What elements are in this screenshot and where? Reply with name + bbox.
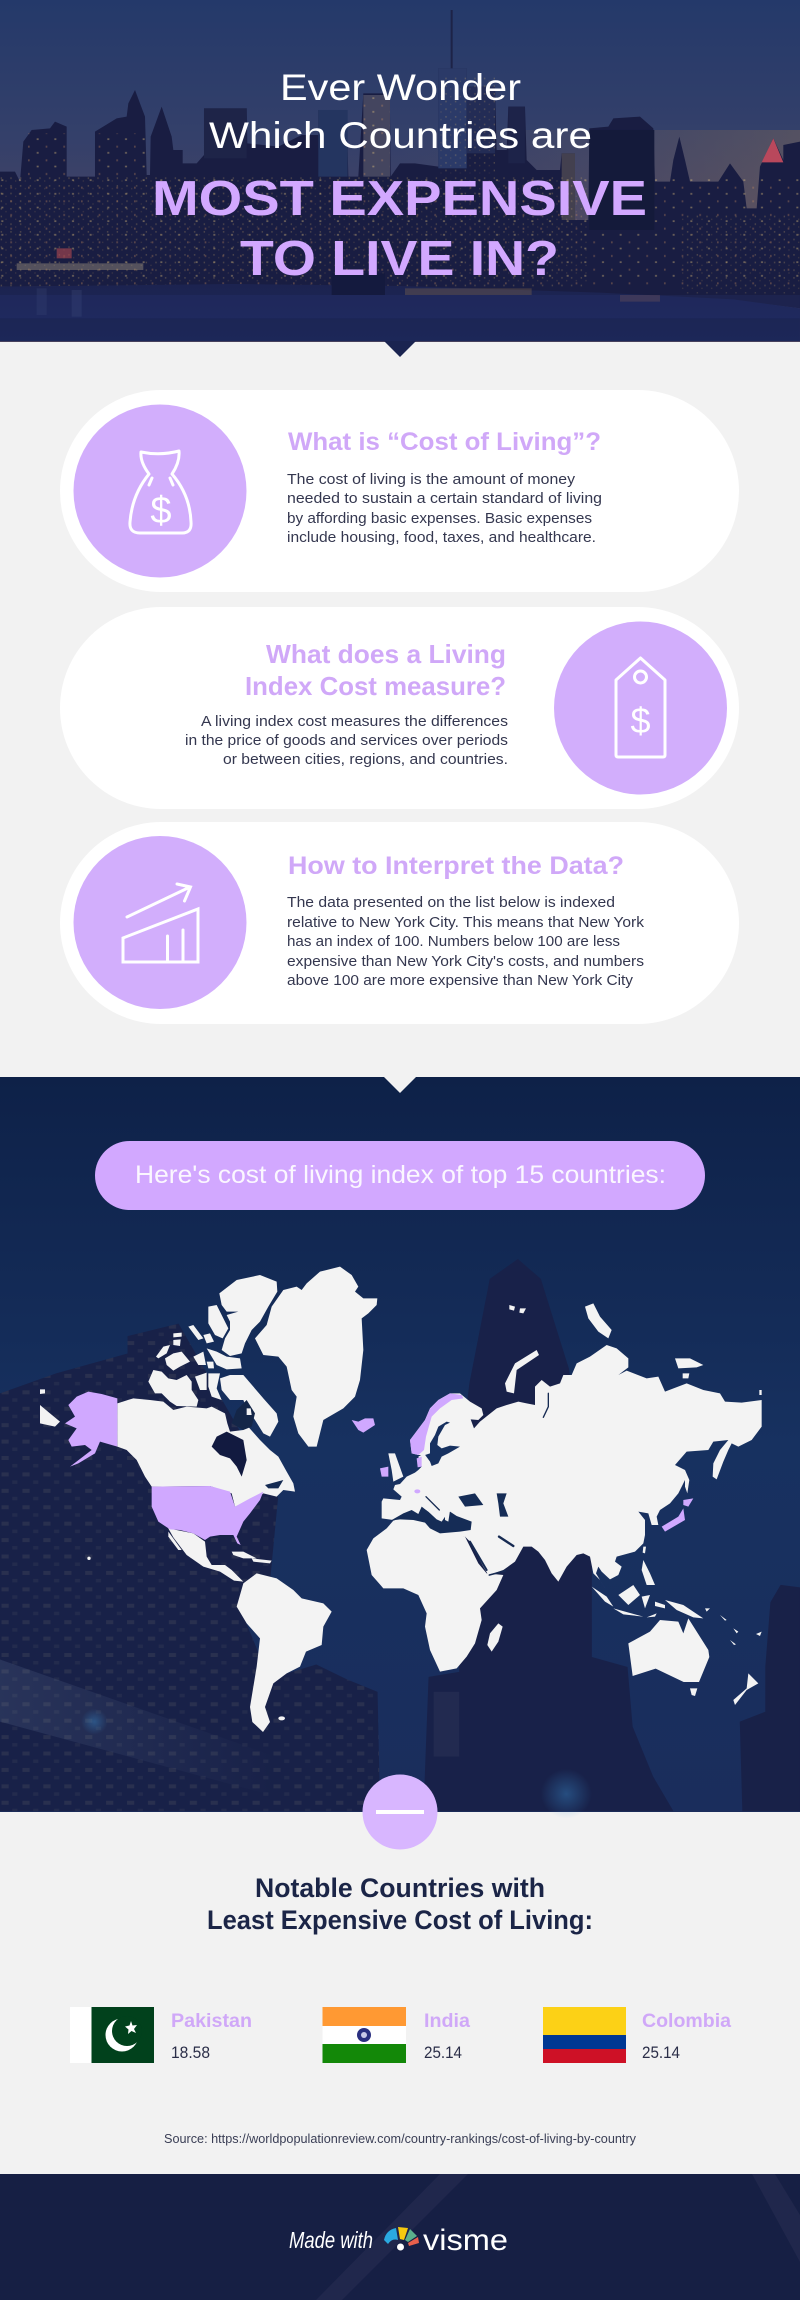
label: Pakistan [171,2011,252,2062]
heading [245,639,506,701]
text block: has an index of 100. Numbers below 100 are less [287,934,620,950]
label: Colombia: Colombia [642,2011,731,2032]
map: Europe, Asia, Africa and Oceania [367,1303,762,1705]
text block: or between cities, regions, and countries. [223,752,508,768]
text block: expensive than New York City's costs, and numbers [287,954,644,970]
icon: rising chart [123,884,198,962]
map: highlighted Denmark and Switzerland [414,1457,422,1493]
flag: Colombia [543,2007,626,2063]
label: Pakistan: 18.58 [171,2043,210,2062]
label: India: 25.14 [424,2043,462,2062]
heading: notable countries: Least Expensive Cost of Living: [207,1905,593,1935]
text block: needed to sustain a certain standard of living [287,491,602,507]
map: highlighted USA [152,1486,263,1545]
title: MOST EXPENSIVE [152,172,647,226]
heading: How to Interpret the Data? [288,852,624,880]
text block: include housing, food, taxes, and healthcare. [287,530,596,546]
world map [40,1267,762,1732]
heading: notable countries [207,1873,593,1935]
panel: what is cost of living [60,390,739,592]
icon: money bag [130,451,191,533]
footer credit: made with visme: visme [423,2224,508,2257]
map: highlighted Norway [410,1393,463,1455]
map: highlighted Ireland [380,1467,388,1477]
callout: top 15 countries [95,1141,705,1210]
label: India: India [424,2011,470,2032]
panel: footer [0,2174,800,2300]
heading: What does a Living [266,639,506,669]
source note: Source: https://worldpopulationreview.com/country-rankings/cost-of-living-by-country [164,2132,637,2146]
panel: how to interpret [60,822,739,1024]
icon: price tag: $ [630,700,651,741]
footer credit: made with visme: Made with [289,2227,373,2253]
text block: above 100 are more expensive than New York City [287,973,634,989]
arrow: hero pointer [384,341,416,357]
seas [391,1493,508,1533]
panel: living index cost [60,607,739,809]
label: Colombia [642,2011,731,2062]
hero: city skyline at dusk [0,0,800,342]
label: India [424,2011,470,2062]
flag: Pakistan [70,2007,154,2063]
text block: The cost of living is the amount of money [287,472,576,488]
icon: money bag: $ [150,490,172,532]
arrow: section pointer [384,1077,416,1093]
map: highlighted Japan [662,1498,693,1532]
title: Which Countries are [209,115,592,156]
heading: notable countries: Notable Countries with [255,1873,545,1903]
text block: by affording basic expenses. Basic expenses [287,511,592,527]
text block [287,472,602,546]
label: Colombia: 25.14 [642,2043,680,2062]
icon: visme logo [384,2227,419,2250]
heading: Index Cost measure? [245,671,506,701]
map: highlighted Iceland [352,1418,375,1433]
title: Ever Wonder [280,67,521,108]
map: highlighted Alaska [65,1392,117,1467]
title [152,67,647,286]
text block [287,895,645,989]
map: Americas and Greenland [40,1267,377,1732]
text block: A living index cost measures the differences [201,714,508,730]
text block: The data presented on the list below is indexed [287,895,615,911]
panel: night city background [0,1077,800,1819]
heading: What is “Cost of Living”? [288,428,601,456]
text block [185,714,508,768]
text block: relative to New York City. This means that New York [287,915,645,931]
flag: India [322,2007,406,2063]
Hudson Bay [212,1432,247,1477]
title: TO LIVE IN? [240,232,559,286]
icon: minus circle [362,1774,438,1850]
icon: price tag [616,658,665,757]
text block: in the price of goods and services over periods [185,733,508,749]
label: Pakistan: Pakistan [171,2011,252,2032]
footer credit: made with visme [289,2224,508,2257]
callout: top 15 countries: Here's cost of living index of top 15 countries: [135,1161,666,1189]
